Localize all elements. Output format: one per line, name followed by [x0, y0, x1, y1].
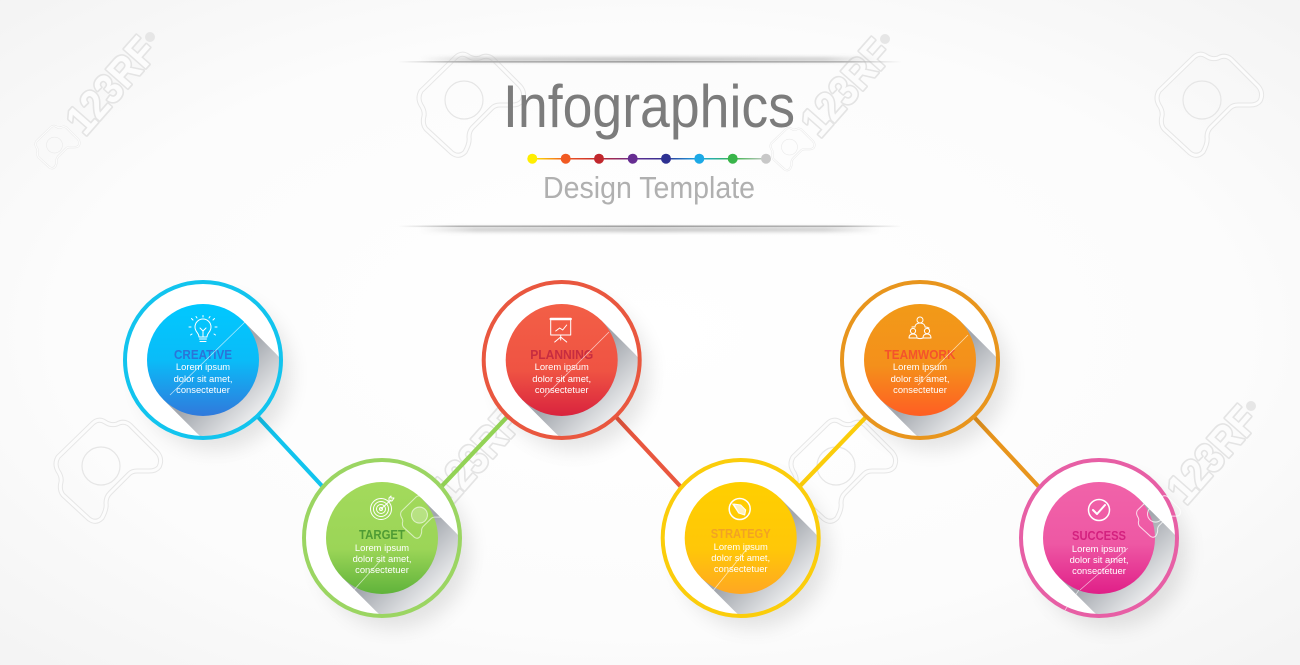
node 2: target: Lorem ipsum [355, 542, 409, 553]
node 2: target: dolor sit amet, [353, 553, 411, 564]
node 3: planning [484, 282, 651, 450]
node 5: teamwork: dolor sit amet, [891, 373, 949, 384]
node 6: success: SUCCESS [1072, 528, 1126, 543]
header top rule [398, 57, 902, 63]
node 5: teamwork [842, 282, 1009, 450]
node 2: target [304, 460, 471, 628]
node 1: creative: CREATIVE [174, 347, 232, 362]
colour dots timeline [527, 154, 771, 164]
watermark: 123RF stamps [36, 28, 1267, 521]
node 6: success: Lorem ipsum [1072, 543, 1126, 554]
title: Infographics [503, 73, 795, 140]
watermark: 123RF stamps: 123RF [1157, 397, 1267, 512]
watermark overlay on discs [170, 322, 1181, 610]
node 3: planning: consectetuer [535, 384, 589, 395]
watermark: 123RF stamps: 123RF [421, 398, 531, 513]
icon: strategy compass [729, 498, 750, 520]
watermark: 123RF stamps: 123RF [791, 30, 901, 145]
node 1: creative: dolor sit amet, [174, 373, 232, 384]
node 3: planning: PLANNING [530, 347, 593, 362]
icon: check mark [1088, 500, 1110, 520]
node 1: creative: Lorem ipsum [176, 361, 230, 372]
node 5: teamwork: Lorem ipsum [893, 361, 947, 372]
subtitle: Design Template [543, 170, 755, 205]
node 3: planning: dolor sit amet, [532, 373, 591, 384]
node 4: strategy: Lorem ipsum [714, 541, 768, 552]
icon: target [370, 496, 394, 520]
node 1: creative [125, 282, 292, 450]
node 4: strategy [663, 460, 830, 628]
icon: light bulb [189, 316, 217, 342]
icon: team of three [909, 317, 931, 339]
node 2: target: TARGET [359, 527, 405, 542]
watermark: 123RF stamps: 123RF [56, 28, 166, 143]
header bottom rule [398, 226, 902, 232]
node 4: strategy: STRATEGY [711, 526, 771, 541]
node 4: strategy: dolor sit amet, [711, 552, 770, 563]
node 6: success: consectetuer [1072, 565, 1126, 576]
node 3: planning: Lorem ipsum [535, 361, 589, 372]
node 5: teamwork: TEAMWORK [884, 347, 956, 362]
connector lines [258, 417, 1039, 487]
node 2: target: consectetuer [355, 564, 409, 575]
node 1: creative: consectetuer [176, 384, 230, 395]
node 4: strategy: consectetuer [714, 563, 768, 574]
node 6: success [1021, 460, 1188, 628]
node 6: success: dolor sit amet, [1070, 554, 1128, 565]
icon: presentation board [551, 319, 571, 342]
node 5: teamwork: consectetuer [893, 384, 947, 395]
